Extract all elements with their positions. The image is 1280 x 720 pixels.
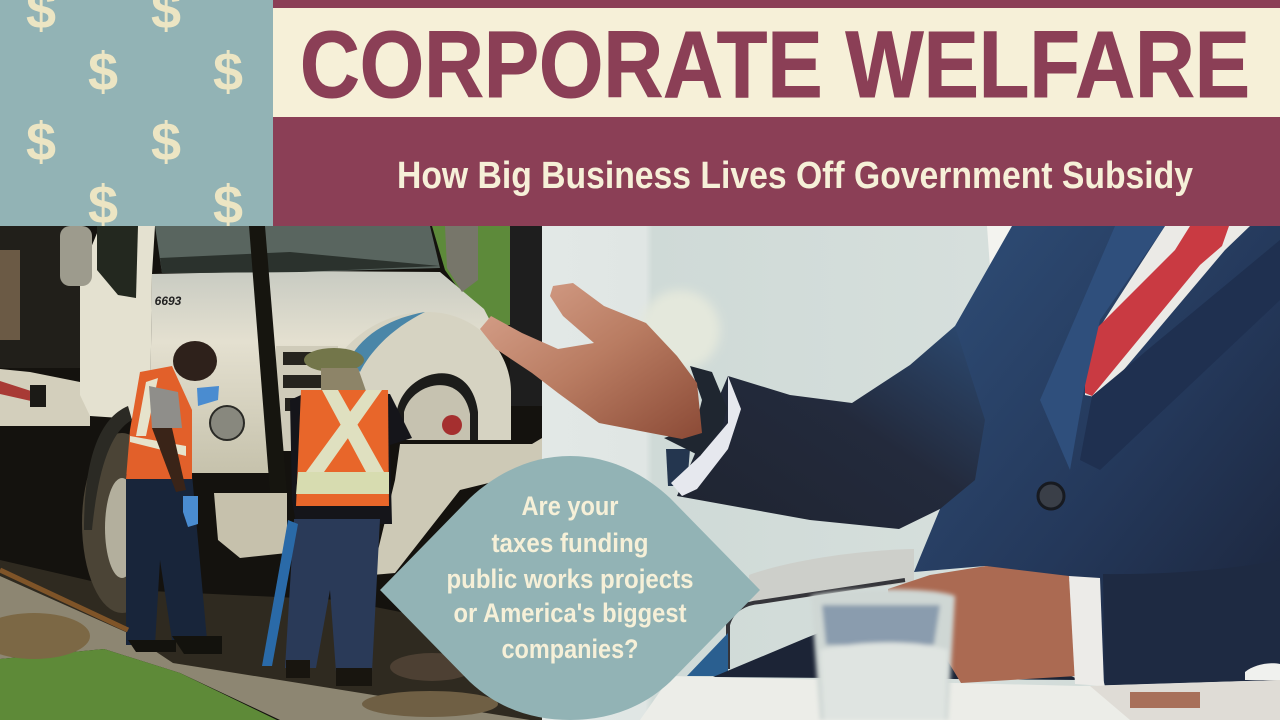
panel: title banner [273,0,1280,226]
worker 2 [262,348,412,686]
boots [286,660,372,686]
callout: question diamond: Are your [522,491,619,521]
inner fender disc [397,373,478,440]
worker 1 [126,341,222,654]
panel: dollar sign pattern [0,0,273,235]
open hand [480,283,702,439]
callout: question diamond: public works projects [446,564,694,594]
callout: question diamond: companies? [502,634,638,664]
water glass [811,589,955,720]
hood [150,271,500,473]
photo: road crew and truck [0,226,542,720]
side mirror right [445,226,478,292]
dark cuff patch [666,449,690,486]
lower cuff [1069,576,1104,686]
boots [128,636,222,654]
callout: question diamond [380,456,760,720]
headlight [210,406,244,440]
wall highlight [640,290,720,370]
panel: dollar sign pattern: $ [88,175,118,235]
jacket body [914,226,1280,686]
panel: dollar sign pattern: $ [213,175,243,235]
shirt and arm [149,386,182,428]
trousers [126,474,207,645]
lapels [1040,226,1165,470]
mirror [60,226,92,286]
head [173,341,217,381]
shirt [290,390,412,524]
trousers [285,519,380,672]
hose pole [249,226,284,473]
vest [126,366,192,479]
papers [1090,680,1280,720]
gloves [197,386,219,406]
sleeve [677,326,985,529]
manhole covers [362,691,498,717]
photo: businessman in suit [542,226,1280,720]
grass [0,649,277,720]
panel: dollar sign pattern: $ [26,112,56,172]
truck number: 6693 [155,294,182,308]
panel: dollar sign pattern: $ [151,112,181,172]
panel: dollar sign pattern: $ [88,42,118,102]
table [640,676,1280,720]
callout: question diamond: taxes funding [492,528,648,558]
callout: question diamond: or America's biggest [454,598,686,628]
vest [296,390,389,506]
shirt [1085,226,1250,398]
sidewalk [0,576,530,720]
icon: shirt cuff and watch [664,366,741,496]
panel: dollar sign pattern: $ [213,42,243,102]
cab door [80,226,155,420]
side window [97,226,138,298]
hedge and background [432,226,512,325]
button [1038,483,1064,509]
rear bumper box [0,369,90,426]
lower hand [888,566,1077,683]
windshield [155,226,440,273]
hose [262,520,298,666]
road [0,560,542,720]
tool plate [372,438,542,575]
hat and hair [304,348,364,372]
subtitle: How Big Business Lives Off Government Subsidy [397,155,1193,197]
basket [0,613,90,659]
wheel [82,433,130,613]
rear equipment [0,226,80,368]
chair [749,549,914,604]
grille [276,346,338,451]
underside machinery [214,493,287,558]
right sleeve [1103,560,1280,686]
wheel arch fender [340,312,511,440]
tie [1085,226,1229,396]
